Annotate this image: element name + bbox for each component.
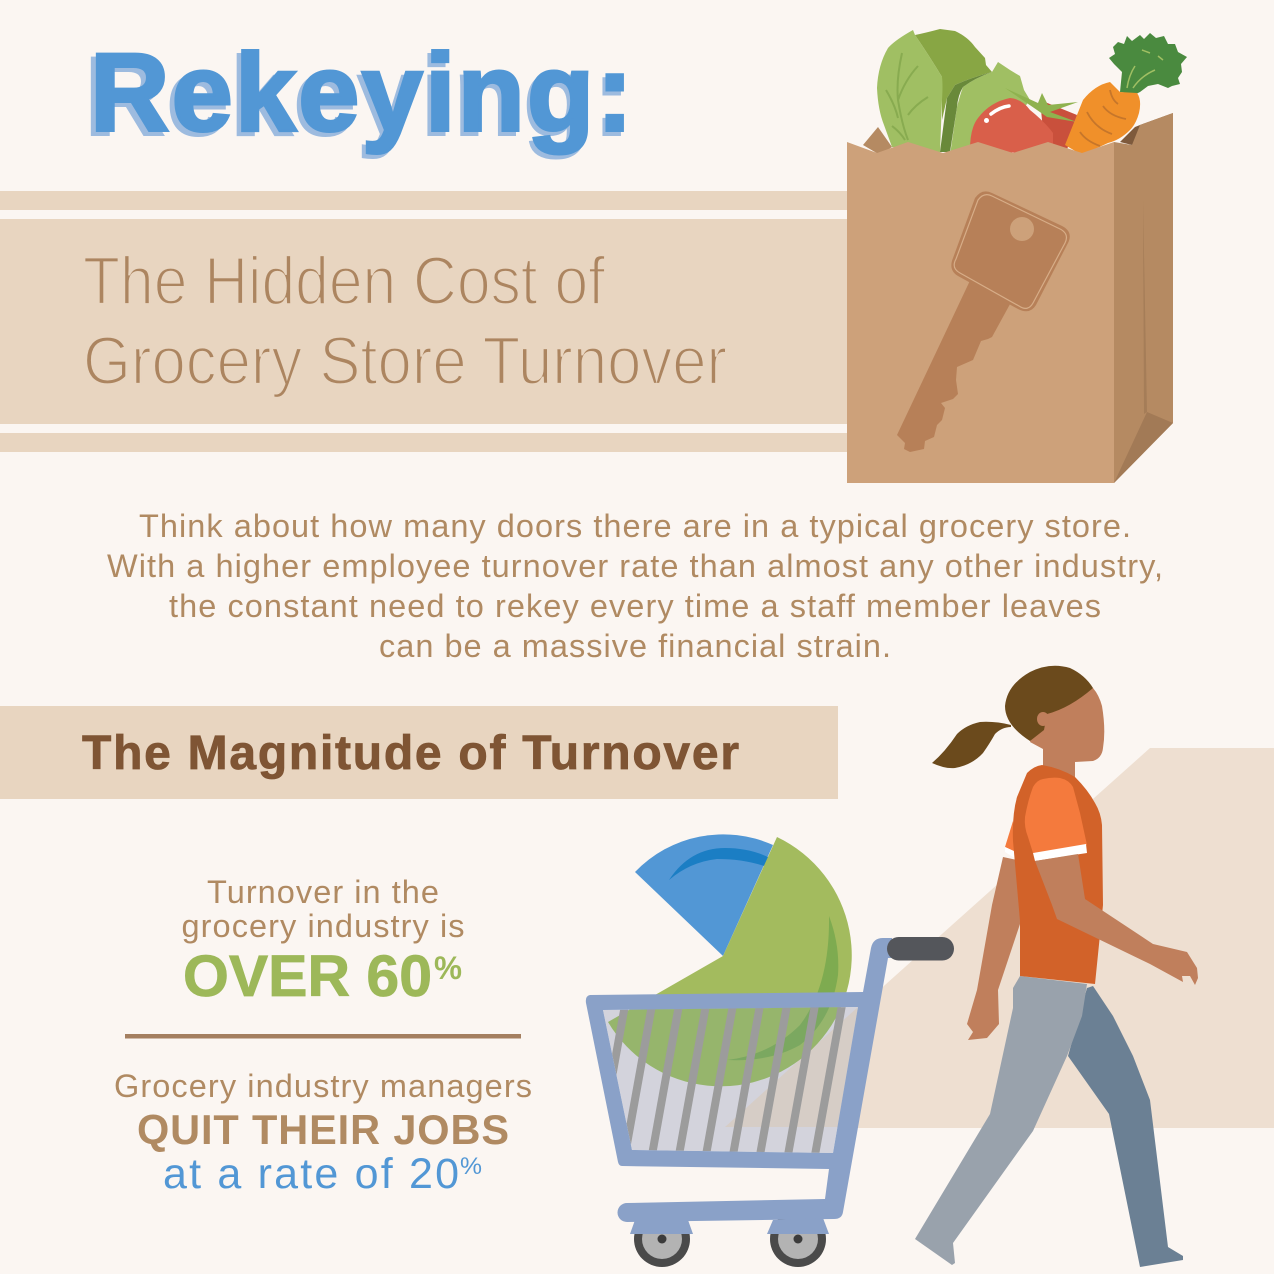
stat: managers quit at 20%: QUIT THEIR JOBS xyxy=(137,1106,509,1153)
cart basket interior xyxy=(603,1007,858,1153)
intro paragraph: With a higher employee turnover rate than almost any other industry, xyxy=(107,548,1163,584)
back arm xyxy=(967,857,1021,1040)
back sleeve xyxy=(1005,821,1018,860)
pie chart in cart xyxy=(608,834,852,1086)
intro paragraph: Think about how many doors there are in a typical grocery store. xyxy=(139,508,1131,544)
icon: lettuce xyxy=(877,29,1030,155)
shirt xyxy=(1013,765,1103,984)
front leg xyxy=(915,976,1087,1265)
stat: turnover over 60%: Turnover in the xyxy=(207,874,439,910)
ear xyxy=(1037,712,1049,726)
icon: carrot greens xyxy=(1109,33,1187,94)
stat: turnover over 60%: % xyxy=(434,950,462,986)
icon: grocery bag with vegetables and key xyxy=(847,29,1187,483)
intro paragraph: can be a massive financial strain. xyxy=(379,628,891,664)
shopper figure xyxy=(915,666,1198,1267)
section heading: The Magnitude of Turnover xyxy=(0,706,838,799)
cart frame xyxy=(586,938,892,1222)
front arm xyxy=(1035,854,1198,985)
bag body xyxy=(1114,113,1173,483)
stat: managers quit at 20%: Grocery industry managers xyxy=(114,1068,532,1104)
stat: turnover over 60%: grocery industry is xyxy=(182,908,464,944)
subtitle banner xyxy=(0,191,850,452)
background shape behind shopper xyxy=(725,748,1274,1128)
stat: turnover over 60% xyxy=(182,874,464,1009)
front sleeve xyxy=(1025,778,1087,853)
stat: managers quit at 20% xyxy=(114,1068,532,1198)
icon: tomato leaves xyxy=(1005,88,1078,122)
section heading: The Magnitude of Turnover: The Magnitude of Turnover xyxy=(82,727,739,780)
cart handle xyxy=(887,937,954,960)
subtitle banner: The Hidden Cost of xyxy=(83,243,605,319)
ponytail xyxy=(932,722,1011,768)
icon: key xyxy=(897,191,1070,452)
title: Rekeying: xyxy=(85,36,630,158)
icon: carrot xyxy=(1065,82,1140,155)
cart wheels xyxy=(634,1211,826,1267)
intro paragraph xyxy=(107,508,1163,664)
intro paragraph: the constant need to rekey every time a staff member leaves xyxy=(169,588,1101,624)
hair xyxy=(1005,666,1093,741)
stat: managers quit at 20%: at a rate of 20 xyxy=(163,1150,459,1198)
stat: turnover over 60%: OVER 60 xyxy=(183,944,432,1009)
icon: tomato xyxy=(970,98,1077,155)
title: Rekeying: xyxy=(90,32,633,154)
neck and face xyxy=(1030,688,1104,782)
stat: managers quit at 20%: % xyxy=(460,1153,482,1180)
shopping cart xyxy=(586,937,954,1267)
back leg xyxy=(1068,986,1183,1267)
subtitle banner: Grocery Store Turnover xyxy=(83,323,727,399)
